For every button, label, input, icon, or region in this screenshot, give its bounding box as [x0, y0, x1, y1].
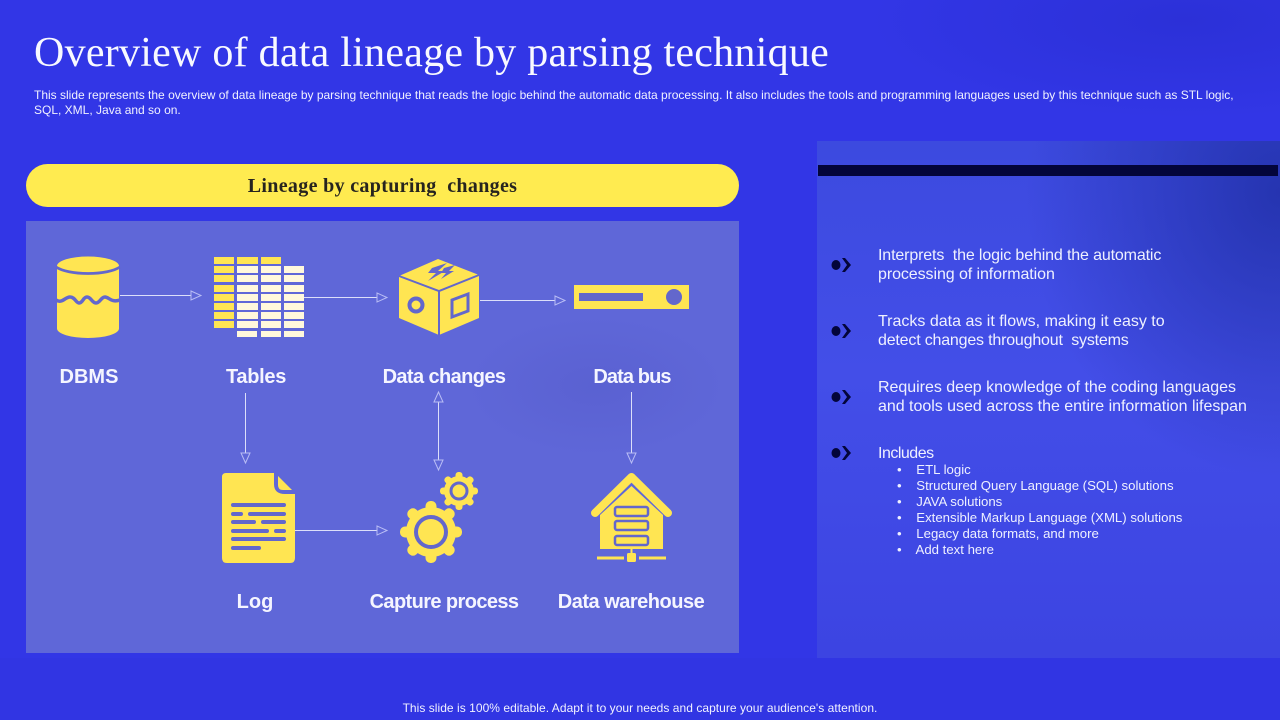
dark header bar [818, 165, 1278, 176]
icon: Data changes box [399, 259, 479, 335]
label: Log: Log [237, 591, 273, 613]
label: DBMS: DBMS [60, 366, 118, 388]
label: Tables: Tables [226, 366, 286, 388]
title: Overview of data lineage by parsing technique [34, 30, 829, 76]
label: Data warehouse: Data warehouse [558, 591, 704, 613]
description text: This slide represents the overview of data lineage by parsing technique that reads the logic behind the automatic data processing. It also includes the tools and programming languages used by this technique such as STL logic, [34, 88, 1234, 102]
list: included items: • ETL logic [897, 462, 971, 477]
list: included items: • Legacy data formats, and more [897, 526, 1099, 541]
label: Data bus: Data bus [593, 366, 671, 388]
icon: Capture process gears [400, 472, 478, 563]
icon: Log document [222, 473, 295, 563]
arrow: Log to Capture process [295, 526, 387, 535]
text: point 3: Requires deep knowledge of the coding languages [878, 379, 1236, 396]
icon: Tables grid [214, 257, 304, 337]
list: included items: • Add text here [897, 542, 994, 557]
arrow: Data changes and Capture process [434, 392, 443, 470]
icon: Data warehouse house [595, 477, 668, 562]
label: Capture process: Capture process [370, 591, 518, 613]
heading pill: lineage by capturing changes [26, 164, 739, 207]
icon: Data bus [574, 285, 689, 309]
panel: flow diagram [26, 221, 739, 653]
arrow: Tables to Log [241, 393, 250, 463]
panel: key points [817, 141, 1280, 658]
arrow: Tables to Data changes [304, 293, 387, 302]
list: included items: • Extensible Markup Language (XML) solutions [897, 510, 1182, 525]
list: included items: • JAVA solutions [897, 494, 1002, 509]
text: point 3: and tools used across the entire information lifespan [878, 398, 1247, 415]
text: point 1: Interprets the logic behind the automatic [878, 247, 1161, 264]
description text: SQL, XML, Java and so on. [34, 102, 181, 116]
text: includes: Includes [878, 445, 934, 462]
arrow: Data bus to Data warehouse [627, 392, 636, 463]
text: point 2: Tracks data as it flows, making it easy to [878, 313, 1165, 330]
text: point 3 [878, 379, 1247, 415]
list: included items [897, 462, 1182, 557]
icon: DBMS cylinder [56, 256, 120, 338]
arrow: Data changes to Data bus [480, 296, 565, 305]
footer note: This slide is 100% editable. Adapt it to your needs and capture your audience's attention. [403, 701, 877, 715]
text: point 1 [878, 247, 1161, 283]
heading pill: lineage by capturing changes: Lineage by capturing changes [248, 175, 517, 197]
label: Data changes: Data changes [383, 366, 505, 388]
arrow: DBMS to Tables [120, 291, 201, 300]
list: included items: • Structured Query Language (SQL) solutions [897, 478, 1174, 493]
description text [34, 88, 1234, 116]
text: point 2: detect changes throughout systems [878, 332, 1129, 349]
text: point 1: processing of information [878, 266, 1055, 283]
text: point 2 [878, 313, 1165, 349]
